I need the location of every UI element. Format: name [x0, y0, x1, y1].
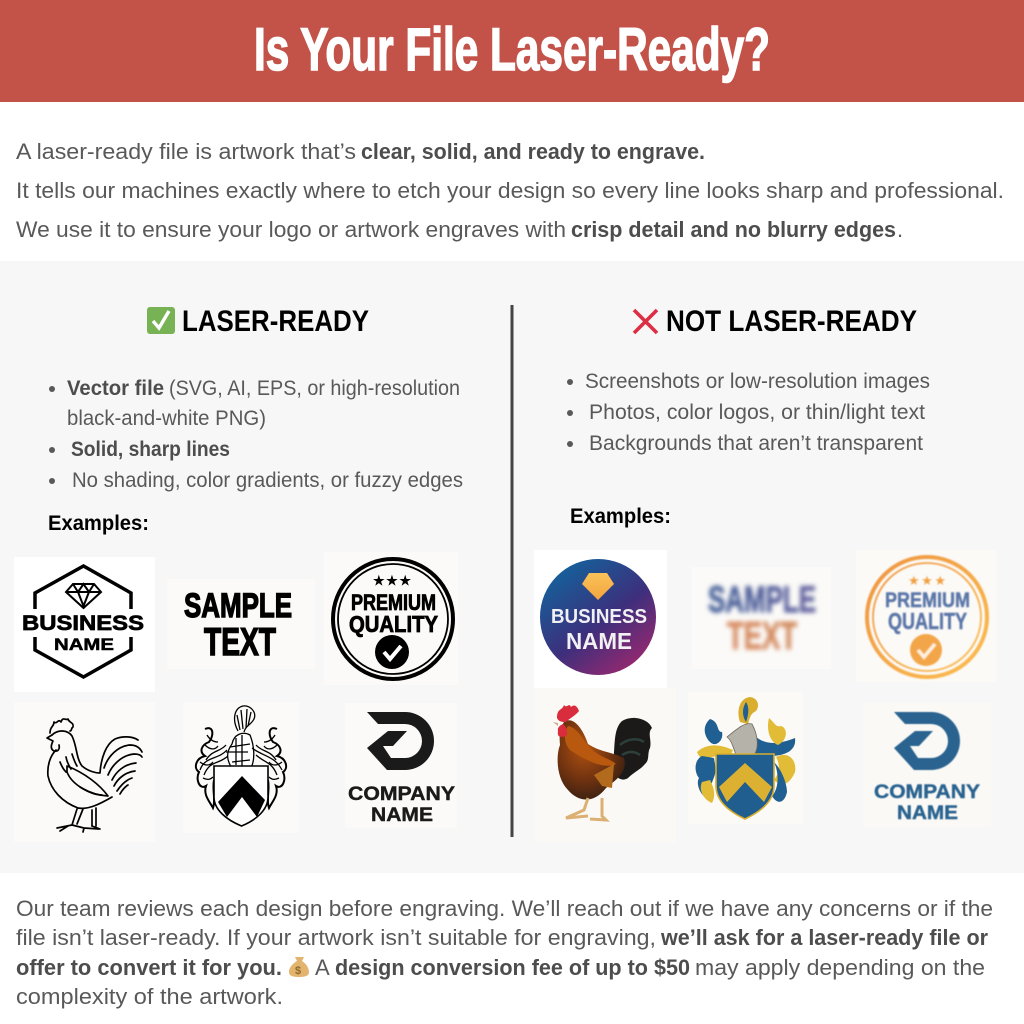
logo: sample text black: TEXT	[204, 621, 276, 664]
laser-ready bullet list: black-and-white PNG)	[67, 407, 266, 430]
footer text block: file isn’t laser-ready. If your artwork isn’t suitable for engraving,	[16, 925, 656, 950]
logo: company name black	[345, 703, 457, 828]
intro text block: It tells our machines exactly where to etch your design so every line looks sharp and professional.	[16, 178, 1004, 203]
intro text block: crisp detail and no blurry edges	[571, 217, 896, 242]
logo: premium quality orange	[856, 550, 997, 682]
icon: red cross	[634, 310, 657, 333]
not laser-ready bullet list	[567, 370, 930, 455]
icon: money bag: $	[295, 965, 301, 977]
comparison panel background	[0, 261, 1024, 873]
intro text block: We use it to ensure your logo or artwork engraves with	[16, 217, 566, 242]
intro text block	[16, 139, 1004, 242]
rooster tail	[612, 718, 652, 780]
logo: company name blue: NAME	[897, 803, 958, 824]
logo: sample text black: SAMPLE	[184, 587, 292, 625]
logo: business name colour: NAME	[566, 628, 632, 654]
footer text block: complexity of the artwork.	[16, 984, 283, 1009]
not laser-ready bullet list: Photos, color logos, or thin/light text	[589, 401, 925, 424]
logo: business name black: NAME	[54, 635, 114, 654]
logo: business name black	[14, 557, 155, 692]
logo: premium quality orange: QUALITY	[888, 608, 967, 634]
logo: rooster line art	[14, 702, 155, 842]
logo: business name colour	[534, 550, 667, 688]
title: Is Your File Laser-Ready?	[254, 16, 770, 83]
logo: premium quality black: ★★★	[373, 573, 411, 588]
logo: sample text blurred: SAMPLE	[708, 579, 816, 620]
intro text block: clear, solid, and ready to engrave.	[361, 139, 705, 164]
footer text block: A	[315, 955, 330, 980]
footer text block: Our team reviews each design before engraving. We’ll reach out if we have any concerns or if the	[16, 896, 993, 921]
laser-ready bullet list: Solid, sharp lines	[71, 438, 230, 461]
logo: company name black: COMPANY	[348, 784, 455, 805]
panel: not laser-ready heading: NOT LASER-READY	[666, 305, 917, 338]
logo: premium quality black	[324, 552, 458, 685]
laser-ready examples label: Examples:	[48, 512, 149, 535]
logo: premium quality orange: PREMIUM	[885, 589, 970, 612]
footer text block: we’ll ask for a laser-ready file or	[660, 925, 988, 950]
footer text block: may apply depending on the	[695, 955, 985, 980]
title banner	[0, 0, 1024, 102]
logo: sample text blurred	[692, 567, 831, 669]
logo: company name blue: COMPANY	[874, 782, 980, 803]
icon: green check	[147, 307, 175, 334]
icon: money bag	[289, 957, 309, 977]
logo: company name black: NAME	[371, 805, 433, 826]
logo: business name black: BUSINESS	[22, 612, 144, 635]
logo: sample text black	[167, 579, 315, 669]
logo: premium quality black: QUALITY	[349, 611, 438, 637]
laser-ready bullet list: No shading, color gradients, or fuzzy edges	[72, 469, 463, 492]
footer text block	[16, 896, 993, 1009]
laser-ready bullet list	[49, 377, 463, 492]
footer text block: offer to convert it for you.	[16, 955, 282, 980]
laser-ready bullet list: (SVG, AI, EPS, or high-resolution	[169, 377, 460, 400]
logo: rooster photo	[534, 688, 676, 842]
logo: premium quality orange: ★★★	[908, 573, 946, 588]
logo: business name colour: BUSINESS	[551, 606, 647, 628]
logo: coat of arms line art	[183, 702, 299, 833]
laser-ready bullet list: Vector file	[67, 377, 164, 400]
logo: company name blue	[863, 703, 991, 827]
panel: laser-ready heading: LASER-READY	[182, 305, 369, 338]
not laser-ready bullet list: Screenshots or low-resolution images	[585, 370, 930, 393]
intro text block: A laser-ready file is artwork that’s	[16, 139, 356, 164]
logo: coat of arms colour	[688, 692, 803, 824]
logo: sample text blurred: TEXT	[727, 615, 797, 658]
not laser-ready examples label: Examples:	[570, 505, 671, 528]
footer text block: design conversion fee of up to $50	[335, 955, 690, 980]
logo: premium quality black: PREMIUM	[351, 590, 436, 615]
intro text block: .	[897, 217, 903, 242]
not laser-ready bullet list: Backgrounds that aren’t transparent	[589, 432, 923, 455]
